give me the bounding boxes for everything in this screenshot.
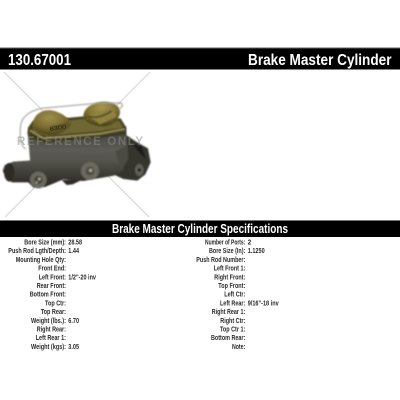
specifications: right column: Left Front 1: [214,266,245,273]
specifications: right column: Top Ctr 1: [220,326,245,334]
part number: 130.67001 [8,52,71,69]
specifications: left column: Left Rear 1: [36,335,66,342]
specifications: right column: Top Front: [218,283,245,290]
cap dome right [83,102,120,126]
specifications: right column: Note: [232,344,245,351]
specifications: left column: Rear Front: [37,283,66,290]
specifications: left column: 1.44 [68,248,79,255]
specifications: right column: 1.1250 [248,248,265,255]
specifications: left column: Weight (lbs.): [31,318,66,325]
specifications: left column: Top Rear: [41,309,66,316]
specifications: left column: 1/2"-20 inv [68,274,96,281]
specifications: right column: Bottom Rear: [211,335,245,342]
specifications: right column: 9/16"-18 inv [248,300,279,307]
specifications: right column: Number of Ports: [205,240,245,246]
specifications: right column: Left Ctr: [224,292,245,299]
specifications: left column [8,240,96,351]
cap dome left [32,110,71,135]
specifications: right column: Right Ctr: [220,318,245,325]
specifications: left column: Mounting Hole Qty: [16,257,66,264]
specifications: right column: Right Front: [214,274,245,281]
product photo: brake master cylinder [3,102,151,188]
reservoir cover [27,116,126,142]
retaining wire [20,103,123,149]
specifications: right column: Bore Size (In): [209,248,245,255]
specifications: right column: Left Rear: [220,300,245,307]
watermark text: REFERENCE ONLY [17,136,143,148]
cylinder casting [3,127,151,188]
specifications: left column: 6.70 [68,318,79,325]
specifications heading: Brake Master Cylinder Specifications [112,221,288,236]
specifications bar [0,220,400,237]
specifications: left column: Weight (kgs): [31,344,66,351]
specifications: left column: Front End: [38,266,66,273]
specifications: left column: 3.05 [68,344,79,351]
specifications: right column: Push Rod Number: [196,257,245,264]
cap stamp text: 6300 [49,124,67,133]
specifications: right column: 2 [248,240,251,246]
watermark cross lines [4,72,150,217]
specifications: left column: 28.58 [68,240,82,246]
specifications: right column: Right Rear 1: [212,309,245,316]
specifications: left column: Bore Size (mm): [24,240,66,246]
header bar [0,48,400,70]
specifications: right column [196,240,279,351]
specifications: left column: Right Rear: [37,326,66,334]
specifications: left column: Push Rod Lgth/Depth: [8,248,66,255]
specifications: left column: Bottom Front: [30,292,66,299]
specifications: left column: Left Front: [39,274,66,281]
specifications: left column: Top Ctr: [45,300,66,307]
